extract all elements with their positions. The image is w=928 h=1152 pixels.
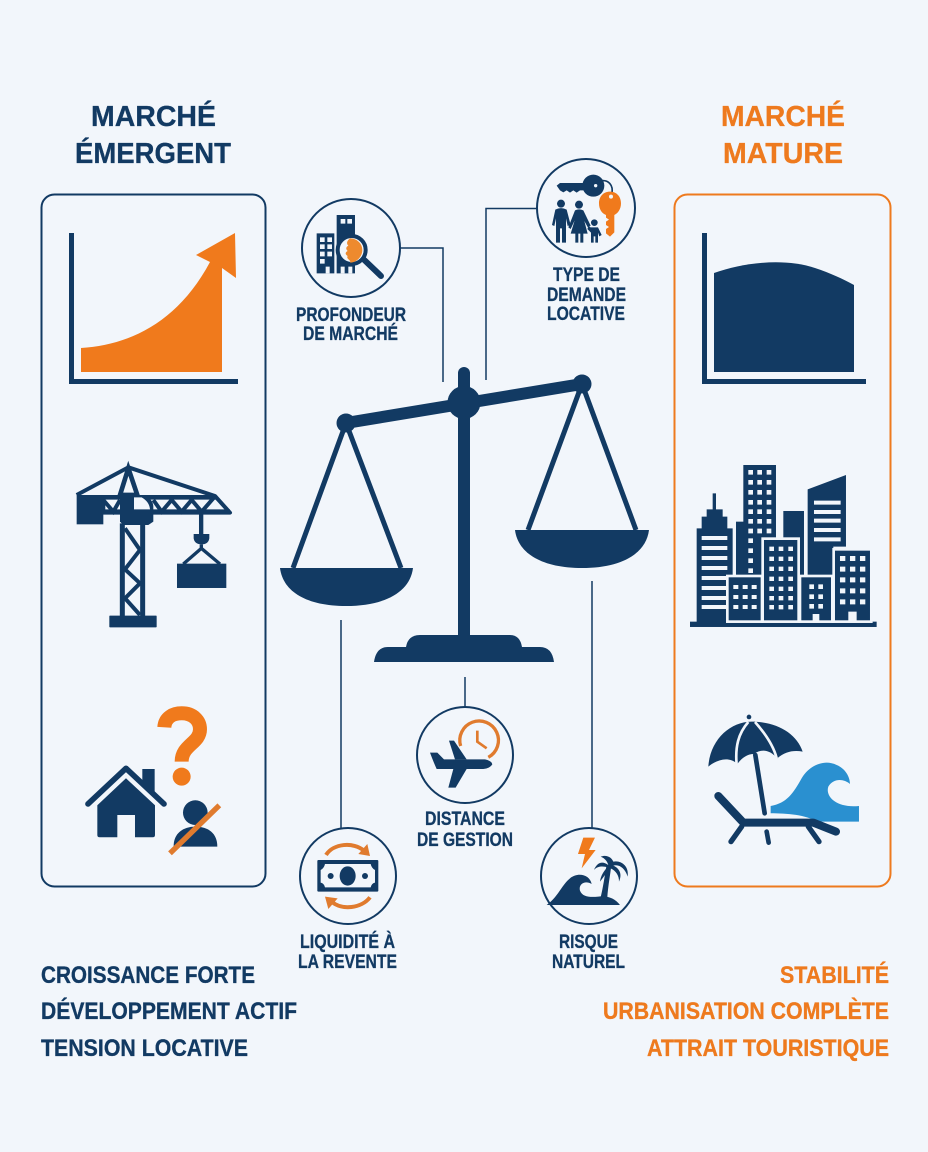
label xyxy=(547,264,626,325)
label: LIQUIDITÉ À xyxy=(300,930,395,953)
title: marché mature: MARCHÉ xyxy=(721,99,845,133)
label: DEMANDE xyxy=(547,284,626,306)
icon: city skyline xyxy=(690,465,877,627)
label xyxy=(298,930,397,973)
text block: emerging traits: TENSION LOCATIVE xyxy=(41,1035,248,1062)
icon: keys and family xyxy=(552,175,621,243)
icon: buildings and magnifier xyxy=(317,215,381,276)
text block: emerging traits: DÉVELOPPEMENT ACTIF xyxy=(41,997,297,1025)
title: marché émergent: ÉMERGENT xyxy=(75,136,231,170)
label: NATUREL xyxy=(552,951,625,973)
factor: profondeur de marché xyxy=(296,199,406,345)
title: marché émergent xyxy=(75,99,231,170)
factor: liquidité à la revente xyxy=(298,828,397,973)
factor: type de demande locative xyxy=(537,159,635,325)
factor: risque naturel xyxy=(541,828,637,973)
label: RISQUE xyxy=(559,931,618,953)
label: TYPE DE xyxy=(553,264,620,286)
title: marché mature: MATURE xyxy=(723,138,843,170)
icon: house with question mark and no tenant xyxy=(88,713,219,853)
text block: mature traits: ATTRAIT TOURISTIQUE xyxy=(647,1035,889,1062)
label: LOCATIVE xyxy=(547,303,625,325)
factor: distance de gestion xyxy=(417,707,513,851)
label: DE MARCHÉ xyxy=(303,322,398,345)
icon: plane and clock xyxy=(430,721,498,788)
text block: mature traits: STABILITÉ xyxy=(780,961,889,989)
label: DE GESTION xyxy=(417,829,513,851)
icon: wave, palm and lightning xyxy=(547,838,628,905)
label xyxy=(552,931,625,973)
central balance scale xyxy=(280,367,649,662)
connector lines xyxy=(341,208,592,828)
title: marché émergent: MARCHÉ xyxy=(91,99,216,133)
title: marché mature xyxy=(721,99,845,170)
text block: emerging traits: CROISSANCE FORTE xyxy=(41,962,255,989)
panel: emerging market xyxy=(42,194,266,886)
label: DISTANCE xyxy=(425,808,505,830)
icon: beach umbrella, lounger and wave xyxy=(708,715,859,843)
label: LA REVENTE xyxy=(298,951,397,973)
panel: mature market xyxy=(674,194,890,886)
text block: emerging traits xyxy=(41,962,297,1062)
icon: banknote with arrows xyxy=(317,844,378,909)
text block: mature traits: URBANISATION COMPLÈTE xyxy=(603,997,889,1025)
text block: mature traits xyxy=(603,961,889,1062)
label: PROFONDEUR xyxy=(296,304,406,326)
label xyxy=(296,304,406,345)
chart: strong growth curve xyxy=(72,233,238,382)
chart: stable plateau xyxy=(704,233,866,382)
label xyxy=(417,808,513,851)
icon: construction crane xyxy=(77,467,230,627)
